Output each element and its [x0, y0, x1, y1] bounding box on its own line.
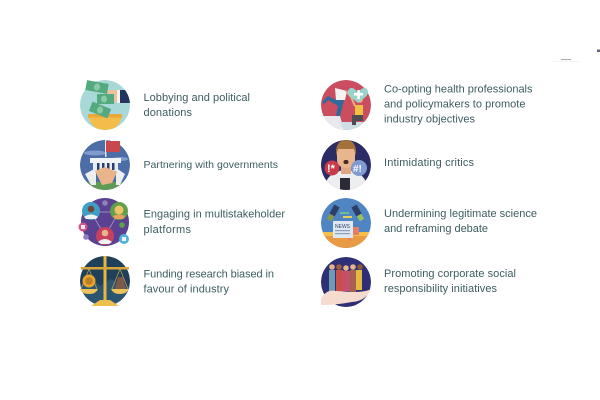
icon: intimidating critics	[321, 140, 371, 190]
text: partnering: Partnering with governments	[144, 159, 278, 171]
text: intimidating: Intimidating critics	[384, 157, 474, 169]
text: multistakeholder: Engaging in multistakeholder	[144, 208, 285, 220]
text: undermining: Undermining legitimate science	[384, 208, 537, 220]
text: co-opting: and policymakers to promote	[384, 98, 526, 110]
icon: partnering with governments	[80, 140, 130, 190]
icon: intimidating critics: #!	[353, 164, 362, 175]
icon: scales	[80, 256, 130, 306]
text: multistakeholder: platforms	[144, 224, 192, 236]
text: corporate social responsibility: Promoting corporate social	[384, 268, 516, 280]
text: lobbying	[144, 92, 250, 119]
text: co-opting: Co-opting health professionals	[384, 84, 533, 96]
text: lobbying: Lobbying and political	[144, 92, 250, 104]
text: funding research: favour of industry	[144, 284, 230, 296]
text: lobbying: donations	[144, 107, 192, 119]
text: corporate social responsibility	[384, 268, 516, 295]
text: co-opting: industry objectives	[384, 114, 476, 126]
text: funding research	[144, 268, 274, 296]
icon: corporate social responsibility	[321, 257, 371, 307]
text: multistakeholder	[144, 208, 285, 236]
icon: undermining science: NEWS	[335, 224, 351, 230]
icon: intimidating critics: !*	[327, 163, 336, 175]
text: co-opting	[384, 84, 533, 126]
text: corporate social responsibility: responsibility initiatives	[384, 283, 498, 295]
icon: multistakeholder platforms	[78, 198, 129, 246]
text: undermining	[384, 208, 537, 235]
icon: co-opting health professionals	[321, 80, 371, 130]
text: funding research: Funding research biased in	[144, 268, 274, 280]
icon: money lobbying	[80, 80, 130, 130]
corner mark	[552, 50, 600, 62]
icon: undermining science	[321, 198, 371, 248]
text: undermining: and reframing debate	[384, 223, 488, 235]
